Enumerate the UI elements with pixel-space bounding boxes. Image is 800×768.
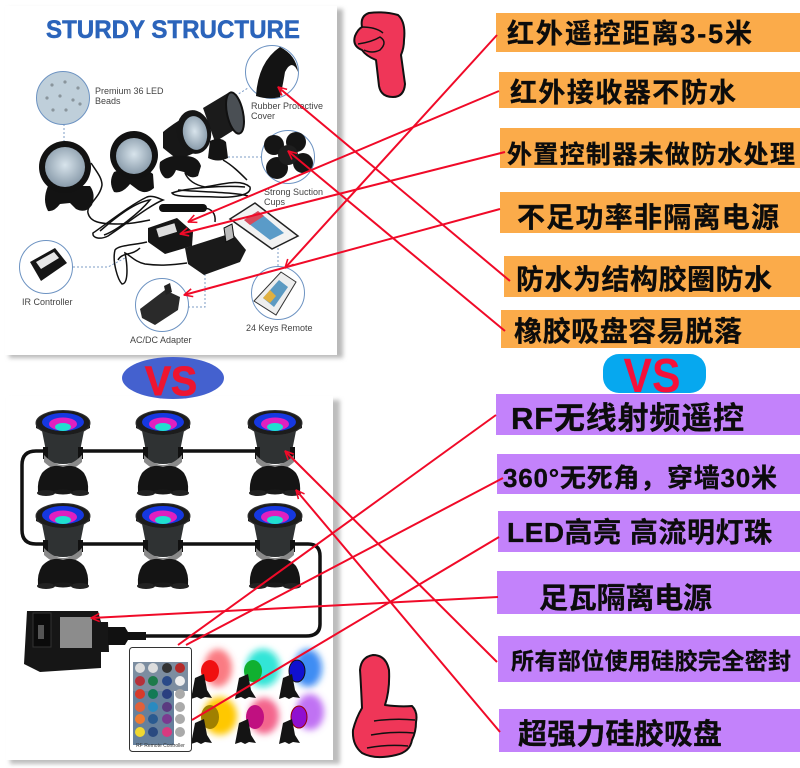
label: full silicone sealing bbox=[498, 636, 800, 682]
callout: rubber cover: Cover bbox=[251, 111, 275, 121]
label: 360 degree range bbox=[497, 454, 800, 494]
dashed callout connectors bbox=[64, 88, 278, 307]
callout: suction cups bbox=[262, 130, 323, 207]
panel: drawbacks list bbox=[496, 13, 800, 348]
callout: suction cups: Cups bbox=[264, 197, 286, 207]
label: 360 degree range: 360°无死角，穿墙30米 bbox=[503, 463, 777, 493]
label: rubber cups bbox=[501, 310, 800, 348]
label: high brightness LED: LED高亮 高流明灯珠 bbox=[507, 517, 772, 548]
label: controller not waterproofed: 外置控制器未做防水处理 bbox=[507, 141, 795, 169]
icon: lamp middle bbox=[110, 131, 158, 192]
label: infrared range bbox=[496, 13, 800, 52]
label: RF remote bbox=[496, 394, 800, 436]
icon: RF remote controller bbox=[130, 648, 192, 752]
VS badge: cyan pill: VS bbox=[624, 350, 680, 403]
icon: lamps row one bbox=[36, 410, 302, 496]
icon: waterproof power supply bbox=[24, 611, 146, 672]
label: IR receiver not waterproof: 红外接收器不防水 bbox=[510, 78, 736, 108]
icon: lamp 3 rear bbox=[203, 91, 247, 160]
VS badge: blue ellipse bbox=[122, 357, 224, 404]
arrows: advantage connectors bbox=[91, 415, 503, 732]
icon: coloured lamps grid bbox=[191, 649, 324, 744]
icon: thumb down bbox=[354, 12, 405, 97]
panel: top product photo bbox=[5, 6, 343, 358]
label: gasket waterproofing: 防水为结构胶圈防水 bbox=[516, 264, 772, 295]
label: strong suction cups bbox=[499, 709, 800, 752]
VS badge: blue ellipse: VS bbox=[145, 358, 197, 404]
arrows: drawback connectors bbox=[180, 35, 510, 331]
cable connector bbox=[163, 204, 203, 212]
callout: LED beads: Premium 36 LED bbox=[95, 86, 164, 96]
label: underpowered supply: 不足功率非隔离电源 bbox=[517, 202, 779, 233]
label: gasket waterproofing bbox=[504, 256, 800, 297]
icon: lamp front bbox=[39, 141, 94, 211]
callout: IR controller: IR Controller bbox=[22, 297, 73, 307]
icon: thumb up bbox=[353, 655, 416, 757]
label: high brightness LED bbox=[498, 511, 800, 552]
callout: 24 keys remote bbox=[246, 266, 313, 333]
label: underpowered supply bbox=[500, 192, 800, 233]
label: RF remote: RF无线射频遥控 bbox=[511, 401, 744, 436]
label: rubber cups: 橡胶吸盘容易脱落 bbox=[514, 316, 742, 347]
label: controller not waterproofed bbox=[500, 128, 800, 169]
icon: RF remote controller: RF Remote Controller bbox=[136, 743, 185, 749]
label: IR receiver not waterproof bbox=[499, 72, 800, 108]
callout: AC/DC adapter: AC/DC Adapter bbox=[130, 335, 192, 345]
label: full silicone sealing: 所有部位使用硅胶完全密封 bbox=[511, 648, 791, 674]
callout: rubber cover: Rubber Protective bbox=[251, 101, 323, 111]
callout: LED beads: Beads bbox=[95, 96, 121, 106]
panel: bottom product photo bbox=[6, 396, 340, 764]
panel: advantages list bbox=[496, 394, 800, 752]
label: isolated supply: 足瓦隔离电源 bbox=[539, 582, 712, 615]
label: isolated supply bbox=[497, 571, 800, 615]
callout: rubber cover bbox=[246, 46, 323, 121]
heading: sturdy structure: STURDY STRUCTURE bbox=[46, 16, 300, 44]
VS badge: cyan pill bbox=[603, 350, 706, 403]
callout: suction cups: Strong Suction bbox=[264, 187, 323, 197]
callout: 24 keys remote: 24 Keys Remote bbox=[246, 323, 313, 333]
icon: IR receiver module bbox=[148, 218, 193, 254]
label: infrared range: 红外遥控距离3-5米 bbox=[507, 19, 752, 49]
icon: lamps row two bbox=[36, 504, 302, 589]
icon: small remote bbox=[230, 203, 298, 249]
label: strong suction cups: 超强力硅胶吸盘 bbox=[518, 718, 722, 751]
callout: IR controller bbox=[20, 240, 73, 307]
icon: power adapter main bbox=[185, 224, 246, 275]
cables bbox=[88, 160, 250, 284]
cable loop bbox=[22, 451, 320, 636]
callout: LED beads bbox=[36, 72, 164, 124]
icon: lamp 2 middle rear bbox=[160, 107, 215, 178]
callout: AC/DC adapter bbox=[130, 278, 192, 345]
